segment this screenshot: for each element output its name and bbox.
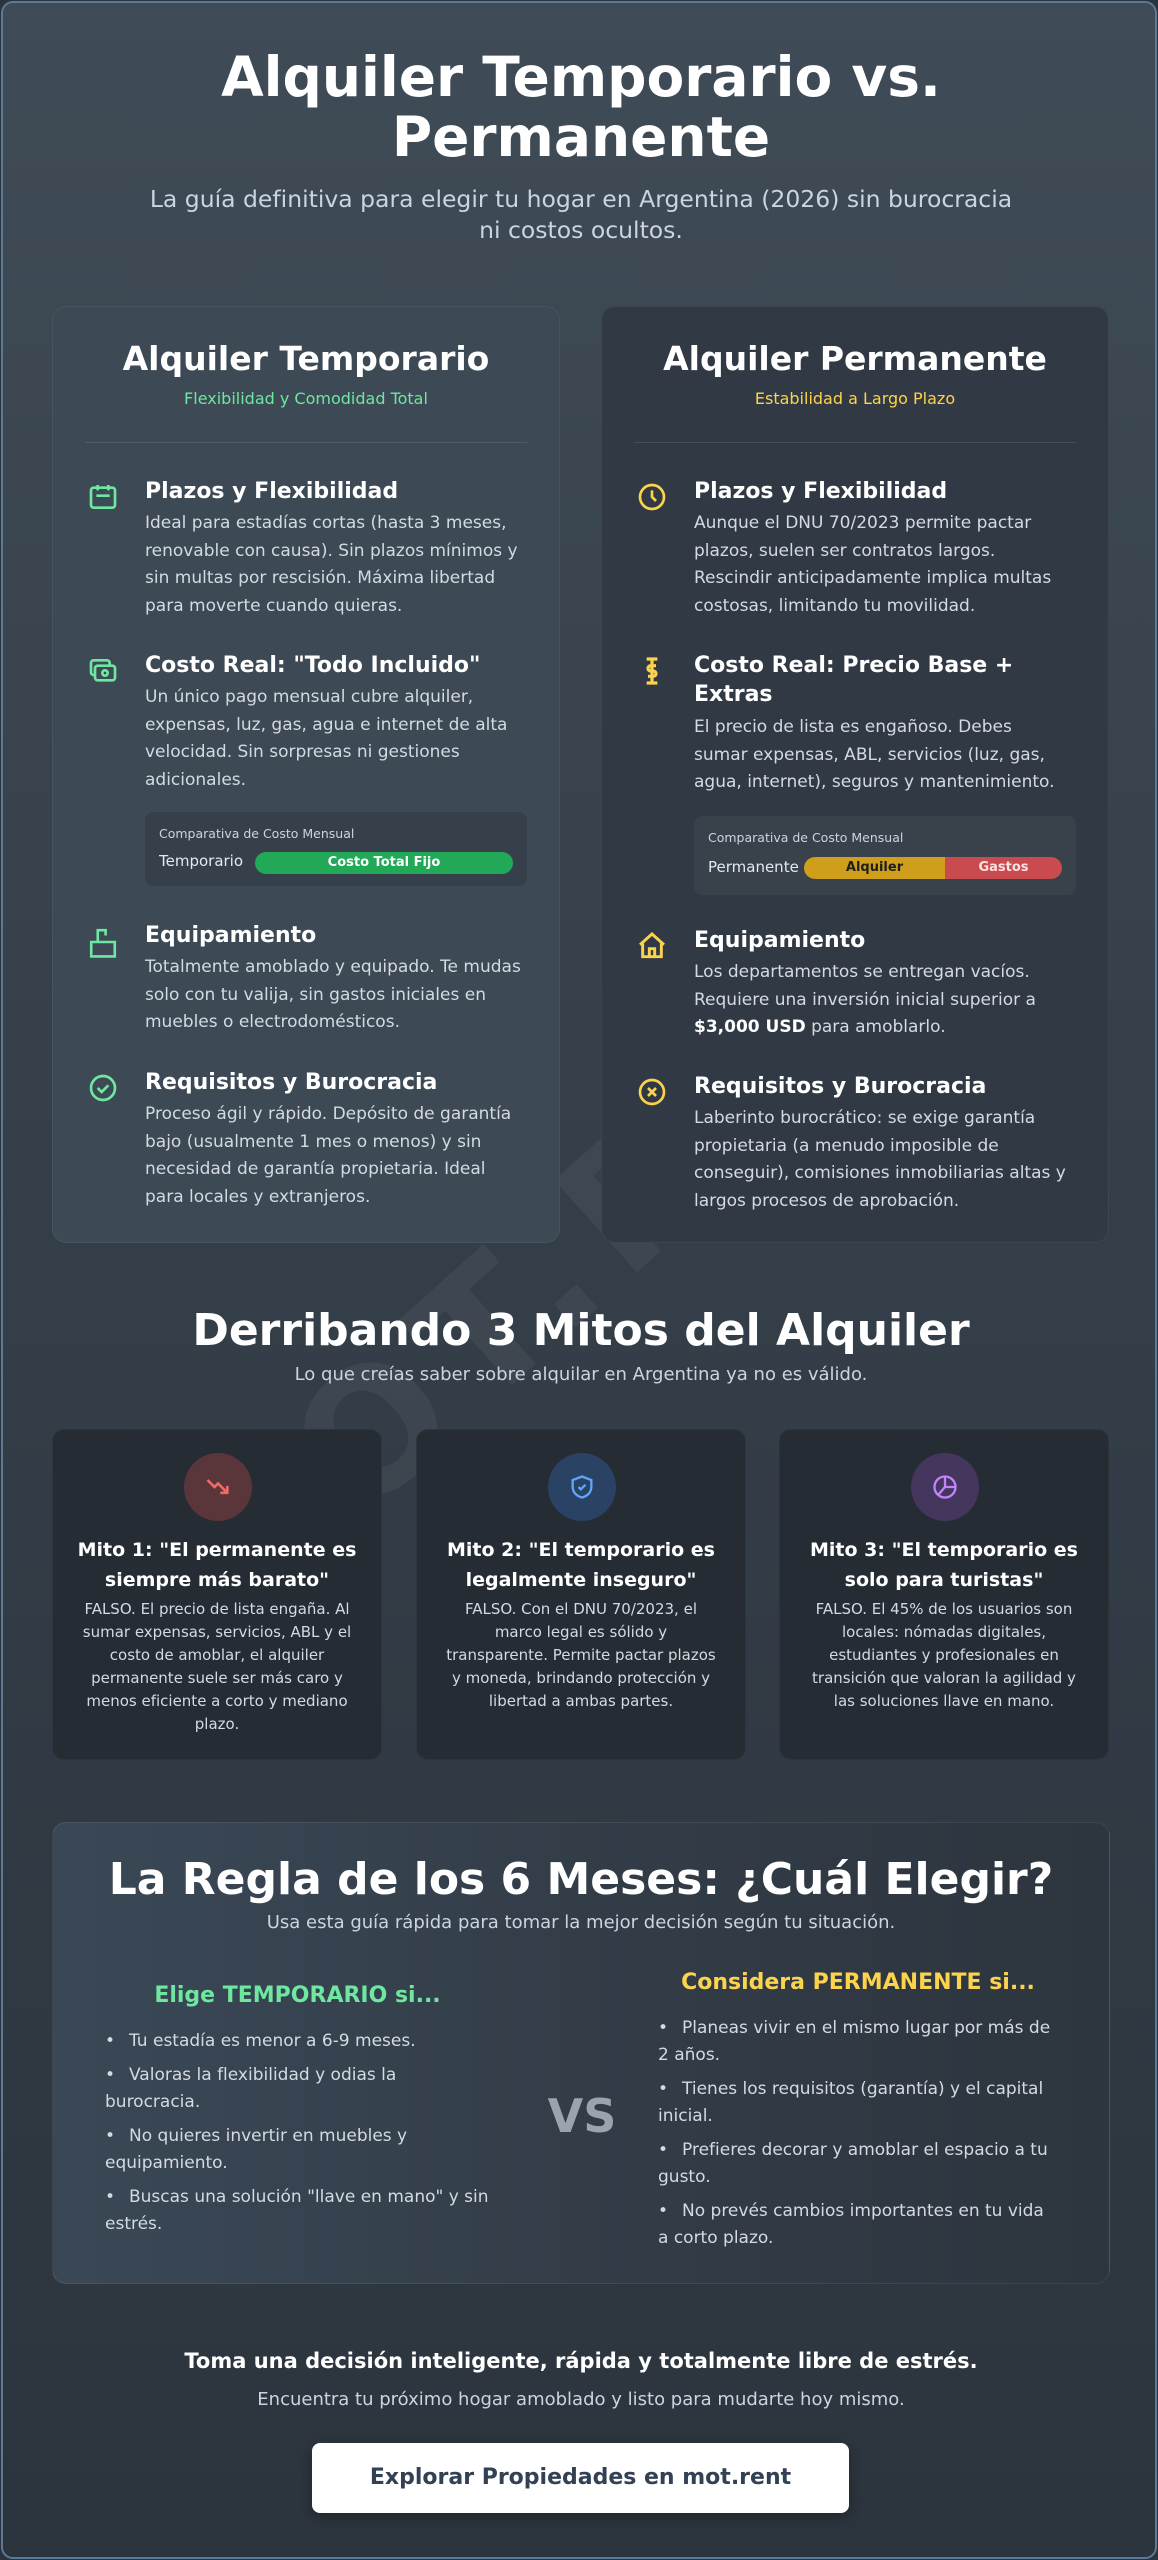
column: temporario: Tu estadía es menor a 6-9 meses. <box>129 2031 416 2051</box>
item: costo <box>90 653 507 790</box>
column: permanente: No prevés cambios importantes en tu vida a corto plazo. <box>658 2201 1044 2248</box>
column: temporario: Valoras la flexibilidad y odias la burocracia. <box>105 2065 396 2112</box>
icon: shield <box>548 1453 616 1521</box>
card: mito 1: FALSO. El precio de lista engaña. Al sumar expensas, servicios, ABL y el costo de amoblar, el alquiler permanente suele ser más caro y menos eficiente a corto y mediano plazo. <box>83 1600 351 1733</box>
column: temporario: Buscas una solución "llave en mano" y sin estrés. <box>105 2187 489 2234</box>
item: costo <box>646 653 1055 792</box>
panel: permanente: Requisitos y Burocracia <box>694 1074 986 1099</box>
card: mito 2 <box>416 1429 746 1760</box>
panel: temporario: Un único pago mensual cubre alquiler, expensas, luz, gas, agua e internet de alta velocidad. Sin sorpresas ni gestiones adicionales. <box>145 687 507 790</box>
card: mito 2: Mito 2: "El temporario es legalmente inseguro" <box>447 1539 715 1591</box>
chart: permanente cost <box>694 816 1076 895</box>
icon: check <box>90 1074 116 1102</box>
column: permanente: Considera PERMANENTE si... <box>681 1970 1035 1995</box>
icon: pie chart <box>911 1453 979 1521</box>
card: mito 1: Mito 1: "El permanente es siempre más barato" <box>78 1539 356 1591</box>
title: Alquiler Temporario vs. <box>221 45 941 109</box>
chart: permanente cost: Permanente <box>708 858 799 876</box>
subtitle <box>150 185 1012 244</box>
card: mito 3: FALSO. El 45% de los usuarios son locales: nómadas digitales, estudiantes y profesionales en transición que valoran la agilidad y las soluciones llave en mano. <box>812 1600 1076 1710</box>
column: temporario <box>105 1983 489 2234</box>
footer subline: Encuentra tu próximo hogar amoblado y listo para mudarte hoy mismo. <box>257 2389 905 2410</box>
panel: permanente: Laberinto burocrático: se exige garantía propietaria (a menudo imposible de conseguir), comisiones inmobiliarias altas y largos procesos de aprobación. <box>694 1108 1066 1210</box>
panel: temporario: Costo Real: "Todo Incluido" <box>145 653 480 678</box>
column: permanente <box>658 1970 1050 2248</box>
subtitle: La guía definitiva para elegir tu hogar en Argentina (2026) sin burocracia <box>150 185 1012 213</box>
card: mito 2: FALSO. Con el DNU 70/2023, el marco legal es sólido y transparente. Permite pactar plazos y moneda, brindando protección y libertad a ambas partes. <box>446 1600 716 1710</box>
title: Permanente <box>392 105 770 169</box>
panel: temporario: Ideal para estadías cortas (hasta 3 meses, renovable con causa). Sin plazos mínimos y sin multas por rescisión. Máxima libertad para moverte cuando quieras. <box>145 513 518 616</box>
icon: dollar stack <box>646 657 658 685</box>
column: temporario: No quieres invertir en muebles y equipamiento. <box>105 2126 407 2173</box>
panel: permanente: Aunque el DNU 70/2023 permite pactar plazos, suelen ser contratos largos. Rescindir anticipadamente implica multas costosas, limitando tu movilidad. <box>694 513 1051 616</box>
panel: permanente: Plazos y Flexibilidad <box>694 479 947 504</box>
panel: permanente: Los departamentos se entregan vacíos. Requiere una inversión inicial superior a $3,000 USD para amoblarlo. <box>694 962 1036 1037</box>
card: mito 1 <box>52 1429 382 1760</box>
icon: x circle <box>638 1078 666 1106</box>
column: permanente: Prefieres decorar y amoblar el espacio a tu gusto. <box>658 2140 1048 2187</box>
subtitle: ni costos ocultos. <box>479 216 683 244</box>
icon: house <box>639 932 665 958</box>
panel: temporario: Proceso ágil y rápido. Depósito de garantía bajo (usualmente 1 mes o menos) y sin necesidad de garantía propietaria. Ideal para locales y extranjeros. <box>145 1104 511 1206</box>
chart: temporario cost: Costo Total Fijo <box>328 855 440 870</box>
panel: regla 6 meses <box>52 1822 1110 2284</box>
heading: mitos: Derribando 3 Mitos del Alquiler <box>192 1305 970 1356</box>
icon: trend down <box>184 1453 252 1521</box>
item: requisitos <box>90 1070 511 1206</box>
icon: money <box>90 659 116 682</box>
chart: temporario cost: Comparativa de Costo Mensual <box>159 826 354 841</box>
panel: permanente: Costo Real: Precio Base + <box>694 653 1013 678</box>
footer headline: Toma una decisión inteligente, rápida y totalmente libre de estrés. <box>184 2349 978 2373</box>
panel: permanente: El precio de lista es engañoso. Debes sumar expensas, ABL, servicios (luz, gas, agua, internet), seguros y mantenimiento. <box>694 717 1055 792</box>
chart: permanente cost: Gastos <box>978 860 1029 875</box>
panel: permanente: Equipamiento <box>694 928 865 953</box>
panel: temporario <box>52 306 560 1243</box>
subheading: mitos: Lo que creías saber sobre alquilar en Argentina ya no es válido. <box>295 1364 867 1385</box>
panel heading: Alquiler Temporario <box>123 339 489 378</box>
panel: temporario: Requisitos y Burocracia <box>145 1070 437 1095</box>
watermark: MOT.RENT <box>113 774 1088 1680</box>
item: plazos <box>90 479 518 616</box>
vs label: VS <box>548 2089 616 2143</box>
panel: temporario: Equipamiento <box>145 923 316 948</box>
chart: temporario cost <box>145 812 527 886</box>
heading: La Regla de los 6 Meses: ¿Cuál Elegir? <box>109 1854 1053 1905</box>
panel: permanente <box>601 306 1109 1243</box>
chart: permanente cost: Comparativa de Costo Mensual <box>708 830 903 845</box>
card: mito 3: Mito 3: "El temporario es solo para turistas" <box>810 1539 1078 1591</box>
column: temporario: Elige TEMPORARIO si... <box>154 1983 441 2008</box>
chart: temporario cost: Temporario <box>159 852 243 870</box>
icon: clock <box>638 484 666 510</box>
icon: calendar <box>90 485 116 509</box>
column: permanente: Planeas vivir en el mismo lugar por más de 2 años. <box>658 2018 1050 2065</box>
card: mito 3 <box>779 1429 1109 1760</box>
title <box>221 45 941 169</box>
panel heading: Alquiler Permanente <box>663 339 1047 378</box>
item: plazos <box>638 479 1051 616</box>
column: permanente: Tienes los requisitos (garantía) y el capital inicial. <box>658 2079 1043 2126</box>
button: cta: Explorar Propiedades en mot.rent <box>370 2465 791 2490</box>
button: cta <box>312 2443 849 2513</box>
chart: permanente cost: Alquiler <box>846 860 903 875</box>
icon: bag <box>90 928 116 958</box>
item: equipamiento <box>90 923 521 1032</box>
panel: temporario: Totalmente amoblado y equipado. Te mudas solo con tu valija, sin gastos iniciales en muebles o electrodomésticos. <box>145 957 521 1032</box>
item: equipamiento <box>639 928 1036 1037</box>
panel: permanente: Extras <box>694 682 773 707</box>
panel subheading: Estabilidad a Largo Plazo <box>755 389 955 408</box>
item: requisitos <box>638 1074 1066 1210</box>
subheading: Usa esta guía rápida para tomar la mejor decisión según tu situación. <box>267 1912 895 1933</box>
panel subheading: Flexibilidad y Comodidad Total <box>184 389 428 408</box>
panel: temporario: Plazos y Flexibilidad <box>145 479 398 504</box>
